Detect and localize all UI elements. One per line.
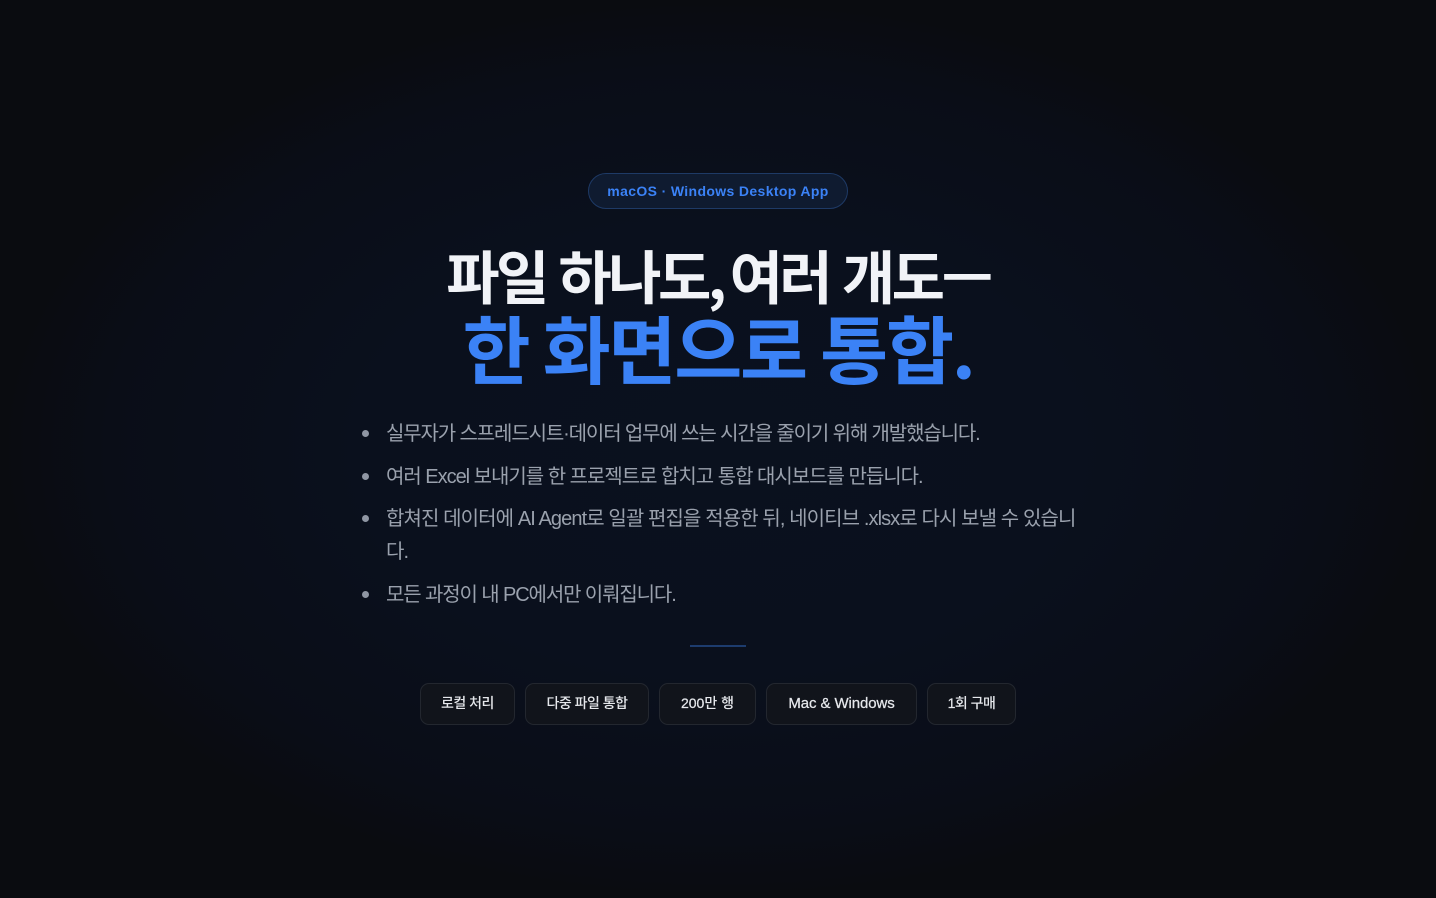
badge: platform [588,173,848,209]
chip: purchase [927,683,1016,725]
bullet list [362,423,1075,606]
chip: platforms [766,683,917,725]
bullet 3 text: 합쳐진 데이터에 AI Agent로 일괄 편집을 적용한 뒤, 네이티브 .xlsx로 다시 보낼 수 있습니 [386,508,1075,530]
chip: local [420,683,515,725]
divider [690,645,746,647]
chip: merge [525,683,649,725]
chip: merge: 다중 파일 통합 [546,695,628,711]
chip: platforms: Mac & Windows [788,695,895,712]
chip: rows [659,683,756,725]
bullet 1 [362,430,369,437]
bullet 4 text: 모든 과정이 내 PC에서만 이뤄집니다. [386,584,676,606]
bullet 4 [362,591,369,598]
bullet 3 [362,515,369,522]
chip: purchase: 1회 구매 [948,695,995,711]
title [446,232,991,400]
feature chips [420,683,1016,725]
bullet 3 text: 다. [386,541,408,563]
bullet 1 text: 실무자가 스프레드시트·데이터 업무에 쓰는 시간을 줄이기 위해 개발했습니다. [386,423,980,445]
chip: rows: 200만 행 [681,695,734,711]
bullet 2 text: 여러 Excel 보내기를 한 프로젝트로 합치고 통합 대시보드를 만듭니다. [386,466,923,488]
title line 1: 파일 하나도, 여러 개도— [446,232,990,316]
title line 2: 한 화면으로 통합. [462,293,974,400]
chip: local: 로컬 처리 [441,695,494,711]
bullet 3 text [386,508,1075,563]
bullet 2 [362,473,369,480]
badge: platform: macOS · Windows Desktop App [607,183,829,199]
